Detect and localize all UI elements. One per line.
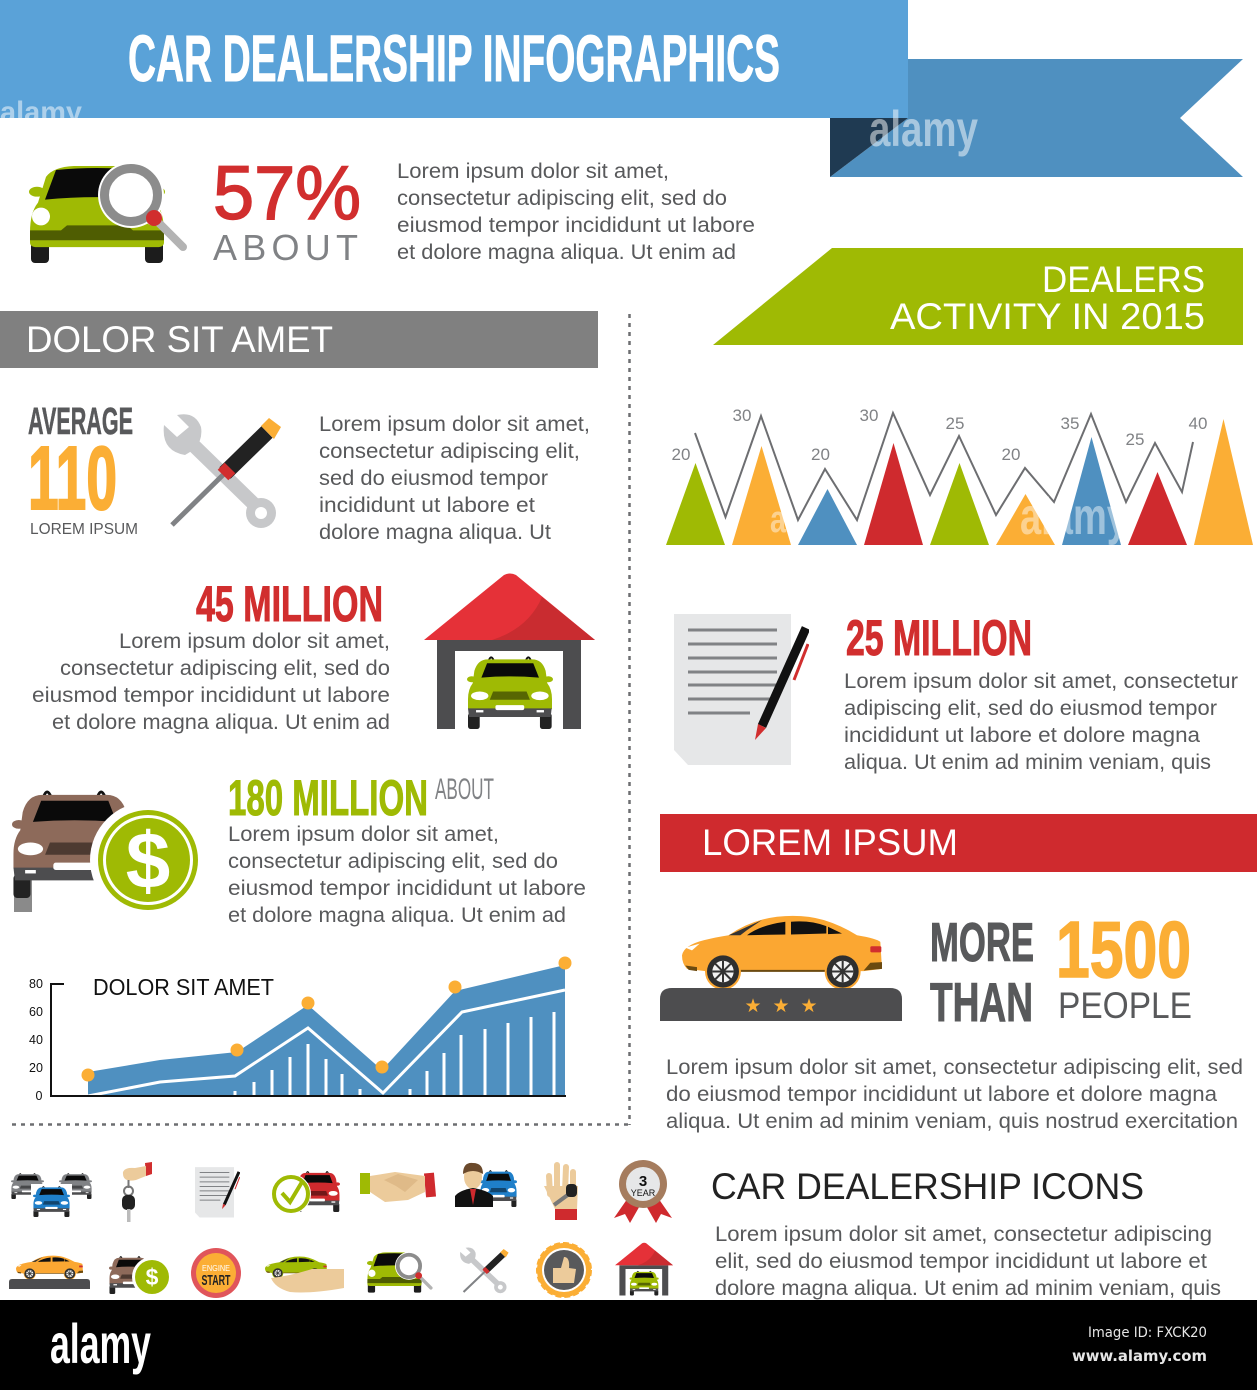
stat: 57% about: ABOUT (213, 227, 358, 268)
text block: average: dolore magna aliqua. Ut (319, 520, 551, 544)
triangle chart: 40 (1189, 414, 1207, 433)
section banner: dealers activity: DEALERS (1042, 259, 1205, 300)
icon: wrench and screwdriver (164, 414, 281, 528)
area chart: 0 (36, 1089, 43, 1103)
section banner: dolor sit amet: DOLOR SIT AMET (26, 319, 333, 360)
footer bar: alamy (50, 1312, 151, 1375)
text block: average: incididunt ut labore et (319, 493, 535, 517)
text block: intro (397, 159, 755, 264)
text block: 45 million: consectetur adipiscing elit, sed do (60, 656, 390, 680)
icon: salesman with blue car (455, 1163, 517, 1207)
icon: hand holding green car (265, 1257, 344, 1292)
icon: handshake (360, 1172, 436, 1202)
stat: more than 1500 people: 1500 (1056, 905, 1191, 994)
area chart: 40 (29, 1033, 43, 1047)
footer bar: Image ID: FXCK20 (1088, 1325, 1207, 1341)
text block: 180 million: Lorem ipsum dolor sit amet, (228, 822, 499, 846)
section banner: dealers activity: ACTIVITY IN 2015 (890, 296, 1205, 337)
icon: engine start button (191, 1248, 241, 1298)
triangle chart: 20 (672, 445, 690, 464)
text block: 180 million (228, 822, 586, 927)
triangle chart: 20 (1002, 445, 1020, 464)
icon row: bottom (9, 1243, 673, 1298)
text block: average: Lorem ipsum dolor sit amet, (319, 412, 590, 436)
text block: 180 million: eiusmod tempor incididunt ut labore (228, 876, 586, 900)
text block: average: consectetur adipiscing elit, (319, 439, 580, 463)
text block: 25 million: Lorem ipsum dolor sit amet, consectetur (844, 669, 1238, 693)
triangle chart: 25 (1126, 430, 1144, 449)
stat: 45 million: 45 MILLION (196, 576, 383, 632)
text block: 45 million (32, 629, 390, 734)
watermark: ribbon: alamy (869, 101, 978, 157)
text block: 180 million: consectetur adipiscing elit, sed do (228, 849, 558, 873)
footer bar: www.alamy.com (1072, 1347, 1207, 1365)
stat: more than 1500 people: MORE (930, 911, 1034, 973)
icon: tools small (460, 1247, 509, 1293)
stat: more than 1500 people: THAN (930, 971, 1033, 1033)
watermark: banner: alamy (0, 96, 82, 129)
footer bar (0, 1300, 1257, 1390)
icon: brown car and dollar small (109, 1257, 172, 1297)
stat: 180 million: 180 MILLION (228, 770, 428, 826)
stat: more than 1500 people: PEOPLE (1058, 985, 1192, 1026)
icon: three cars (11, 1173, 92, 1219)
icon: 3 year ribbon badge (614, 1160, 672, 1223)
area chart: 20 (29, 1061, 43, 1075)
icon: yellow car small (9, 1256, 90, 1289)
icon: garage small (615, 1243, 673, 1295)
icon: brown car with dollar coin: $ (126, 816, 170, 905)
triangle chart: 25 (946, 414, 964, 433)
text block: 180 million: et dolore magna aliqua. Ut enim ad (228, 903, 566, 927)
text block: 45 million: eiusmod tempor incididunt ut labore (32, 683, 390, 707)
icon: brown car and dollar small: $ (146, 1264, 159, 1290)
triangle chart (666, 406, 1253, 546)
text block: people: Lorem ipsum dolor sit amet, consectetur adipiscing elit, sed (666, 1055, 1243, 1079)
icon row: top (11, 1160, 672, 1223)
text block: icons (715, 1222, 1221, 1300)
text block: icons: Lorem ipsum dolor sit amet, consectetur adipiscing (715, 1222, 1212, 1246)
triangle chart: 30 (733, 406, 751, 425)
stat: 25 million: 25 MILLION (846, 610, 1032, 666)
text block: 25 million: aliqua. Ut enim ad minim veniam, quis (844, 750, 1211, 774)
text block: intro: consectetur adipiscing elit, sed do (397, 186, 727, 210)
icon: yellow car on rating podium: ★ (800, 996, 818, 1017)
triangle chart: 30 (860, 406, 878, 425)
text block: intro: Lorem ipsum dolor sit amet, (397, 159, 669, 183)
icon: hand with key (122, 1162, 152, 1222)
text block: icons: elit, sed do eiusmod tempor incididunt ut labore et (715, 1249, 1207, 1273)
icon: garage with car (424, 574, 595, 729)
icon: brown car with dollar coin (12, 792, 206, 918)
section banner: dolor sit amet (0, 311, 598, 368)
icon: green car with magnifier small (367, 1252, 431, 1293)
section banner: lorem ipsum: LOREM IPSUM (702, 822, 958, 863)
stat: more than 1500 people (930, 905, 1192, 1033)
area chart: 80 (29, 977, 43, 991)
text block: people: do eiusmod tempor incididunt ut labore et dolore magna (666, 1082, 1217, 1106)
text block: average: sed do eiusmod tempor (319, 466, 548, 490)
title banner: CAR DEALERSHIP INFOGRAPHICS (128, 21, 780, 95)
icon: green car with magnifier (29, 162, 183, 263)
stat: average 110: LOREM IPSUM (30, 521, 138, 538)
ribbon tail (830, 59, 1243, 177)
stat: average 110: 110 (28, 429, 117, 529)
text block: intro: et dolore magna aliqua. Ut enim ad (397, 240, 736, 264)
text block: intro: eiusmod tempor incididunt ut labore (397, 213, 755, 237)
stat: average 110 (28, 401, 138, 538)
icon: yellow car on rating podium (660, 916, 902, 1021)
icon: 3 year ribbon badge: 3 (639, 1173, 647, 1190)
stat: 180 million: ABOUT (435, 773, 494, 806)
icon: engine start button: ENGINE (202, 1263, 230, 1273)
area chart (29, 956, 572, 1103)
text block: 25 million: adipiscing elit, sed do eiusmod tempor (844, 696, 1217, 720)
triangle chart: 20 (811, 445, 830, 464)
icon: 3 year ribbon badge: YEAR (631, 1188, 656, 1198)
icon: yellow car on rating podium: ★ (744, 996, 762, 1017)
text block: people: aliqua. Ut enim ad minim veniam, quis nostrud exercitation (666, 1109, 1238, 1133)
icon: document small (195, 1167, 240, 1218)
icon: yellow car on rating podium: ★ (772, 996, 790, 1017)
text block: average (319, 412, 590, 544)
area chart: DOLOR SIT AMET (93, 974, 274, 1000)
text block: 25 million: incididunt ut labore et dolore magna (844, 723, 1200, 747)
section banner: dealers activity (713, 248, 1243, 345)
text block: 25 million (844, 669, 1238, 774)
text block: icons: dolore magna aliqua. Ut enim ad minim veniam, quis (715, 1276, 1221, 1300)
icon: engine start button: START (202, 1272, 230, 1289)
triangle chart: alamy (1020, 488, 1128, 546)
section banner: lorem ipsum (660, 814, 1257, 872)
icon: thumbs up badge (537, 1243, 591, 1297)
stat: average 110: AVERAGE (28, 401, 133, 443)
title banner (0, 0, 908, 118)
area chart: 60 (29, 1005, 43, 1019)
triangle chart: 35 (1061, 414, 1079, 433)
icon: document and pen (674, 614, 808, 765)
icon: car with check mark (271, 1172, 340, 1214)
text block: 45 million: Lorem ipsum dolor sit amet, (119, 629, 390, 653)
text block: 45 million: et dolore magna aliqua. Ut enim ad (52, 710, 390, 734)
triangle chart: a (770, 499, 787, 541)
heading: car dealership icons: CAR DEALERSHIP ICONS (711, 1166, 1144, 1207)
icon: hand holding key (544, 1165, 578, 1220)
text block: people (666, 1055, 1243, 1133)
stat: 57% about: 57% (213, 151, 361, 236)
